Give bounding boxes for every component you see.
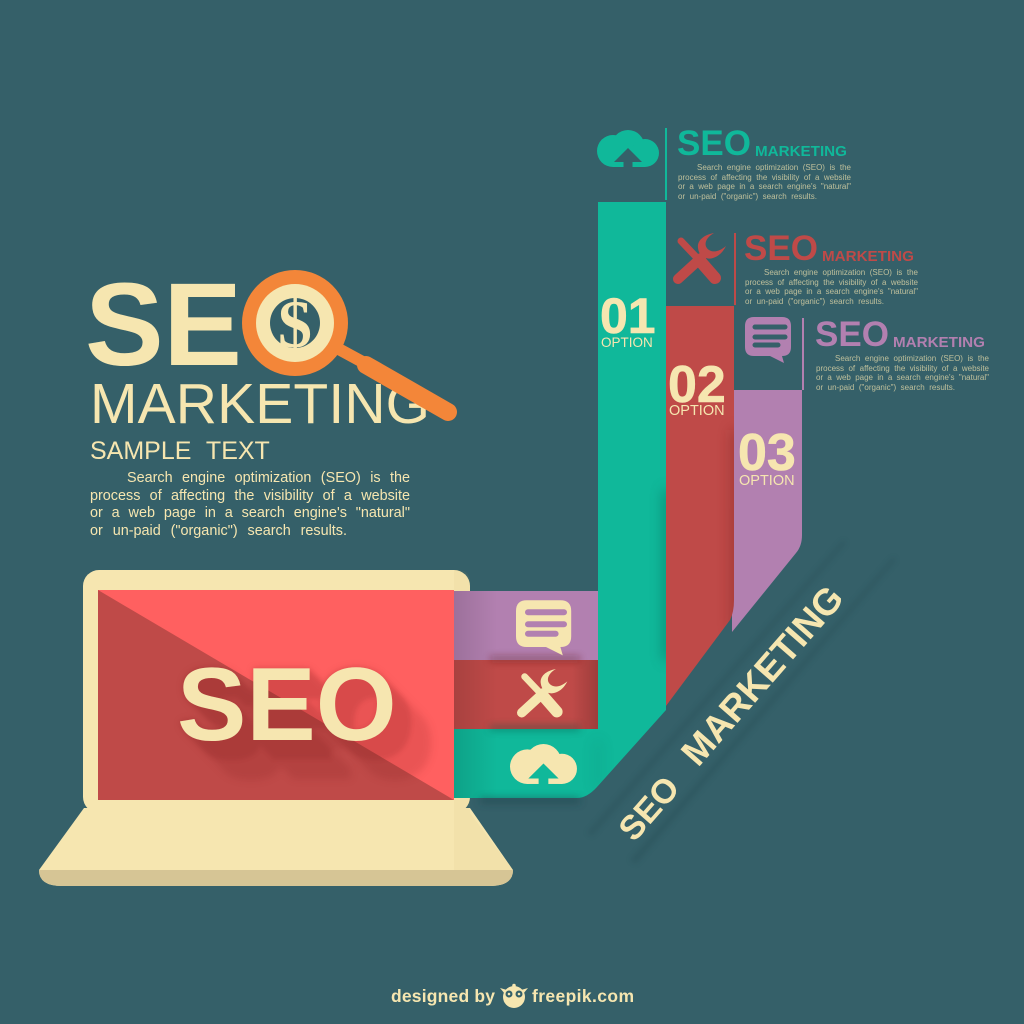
- number 03: 03: [738, 424, 796, 482]
- chart: teal column 01 with bottom strip: [454, 202, 672, 798]
- block 2 paragraph: process of affecting the visibility of a website: [745, 278, 918, 286]
- main paragraph: [90, 470, 410, 539]
- strip: purple: [454, 591, 598, 660]
- main paragraph: Search engine optimization (SEO) is the: [127, 470, 410, 486]
- block 1 heading SEO: SEO: [677, 124, 751, 163]
- main title SEO: SE: [85, 259, 242, 391]
- block 2 heading SEO: SEO: [744, 229, 818, 268]
- diagonal label SEO MARKETING: MARKETING: [673, 578, 852, 773]
- block 2 divider: [734, 233, 736, 305]
- main paragraph: or a web page in a search engine's "natural": [90, 505, 410, 521]
- block 3 heading SEO: SEO: [815, 315, 889, 354]
- block 3 paragraph: or un-paid ("organic") search results.: [816, 382, 955, 392]
- block 1 header: cloud icon: [597, 130, 659, 167]
- block 2 header: tools icon: [678, 233, 726, 279]
- block 3 heading MARKETING: MARKETING: [893, 334, 985, 351]
- block 2 paragraph: Search engine optimization (SEO) is the: [764, 268, 918, 277]
- block 1 paragraph: or un-paid ("organic") search results.: [678, 192, 817, 200]
- footer credit: designed by: designed by: [391, 986, 495, 1006]
- block 2 paragraph: or un-paid ("organic") search results.: [745, 296, 884, 306]
- diagonal label SEO MARKETING: SEO: [611, 769, 687, 848]
- block 1 divider: [665, 128, 667, 200]
- block 3 paragraph: process of affecting the visibility of a website: [816, 364, 989, 372]
- icon: chat on purple strip: [516, 600, 571, 655]
- label option 02: OPTION: [669, 403, 725, 419]
- block 1 heading MARKETING: MARKETING: [755, 143, 847, 160]
- diagonal label SEO MARKETING: [611, 578, 852, 848]
- screen text SEO with long shadow: SEO: [177, 647, 397, 763]
- footer credit: freepik.com: freepik.com: [532, 986, 634, 1006]
- strip shadow below teal: [480, 798, 580, 803]
- icon: cloud on teal strip: [510, 744, 577, 784]
- block 3 divider: [802, 318, 804, 390]
- block 1 paragraph: or a web page in a search engine's "natural": [678, 182, 851, 191]
- block 1 paragraph: Search engine optimization (SEO) is the: [697, 163, 851, 172]
- label option 01: OPTION: [601, 335, 653, 350]
- block 3 paragraph: or a web page in a search engine's "natural": [816, 373, 989, 382]
- main paragraph: or un-paid ("organic") search results.: [90, 523, 347, 539]
- footer icon: freepik mascot: [500, 984, 528, 1008]
- block 1 paragraph: [678, 163, 851, 200]
- number 02: 02: [668, 356, 726, 414]
- main paragraph: process of affecting the visibility of a website: [90, 488, 410, 504]
- icon: magnifying glass with dollar: $: [278, 286, 312, 362]
- panel: diagonal band shadows: [587, 540, 896, 864]
- block 3 paragraph: Search engine optimization (SEO) is the: [835, 354, 989, 363]
- laptop screen: [98, 590, 454, 800]
- chart: red column 02: [666, 306, 734, 706]
- number 01: 01: [600, 288, 656, 344]
- block 1 paragraph: process of affecting the visibility of a website: [678, 172, 851, 182]
- label option 03: OPTION: [739, 473, 795, 489]
- chart: purple column 03: [732, 390, 802, 632]
- strip shading: [454, 591, 598, 798]
- strip: red: [454, 660, 598, 729]
- icon: magnifying glass with dollar: [242, 270, 448, 412]
- block 2 heading MARKETING: MARKETING: [822, 248, 914, 265]
- subtitle: sample text: SAMPLE TEXT: [90, 437, 270, 465]
- block 3 paragraph: [816, 354, 989, 392]
- block 3 header: chat icon: [745, 317, 791, 363]
- block 2 paragraph: or a web page in a search engine's "natural": [745, 287, 918, 296]
- laptop: [39, 570, 513, 886]
- main title MARKETING: MARKETING: [90, 372, 430, 436]
- icon: tools on red strip: [522, 669, 567, 713]
- block 2 paragraph: [745, 268, 918, 306]
